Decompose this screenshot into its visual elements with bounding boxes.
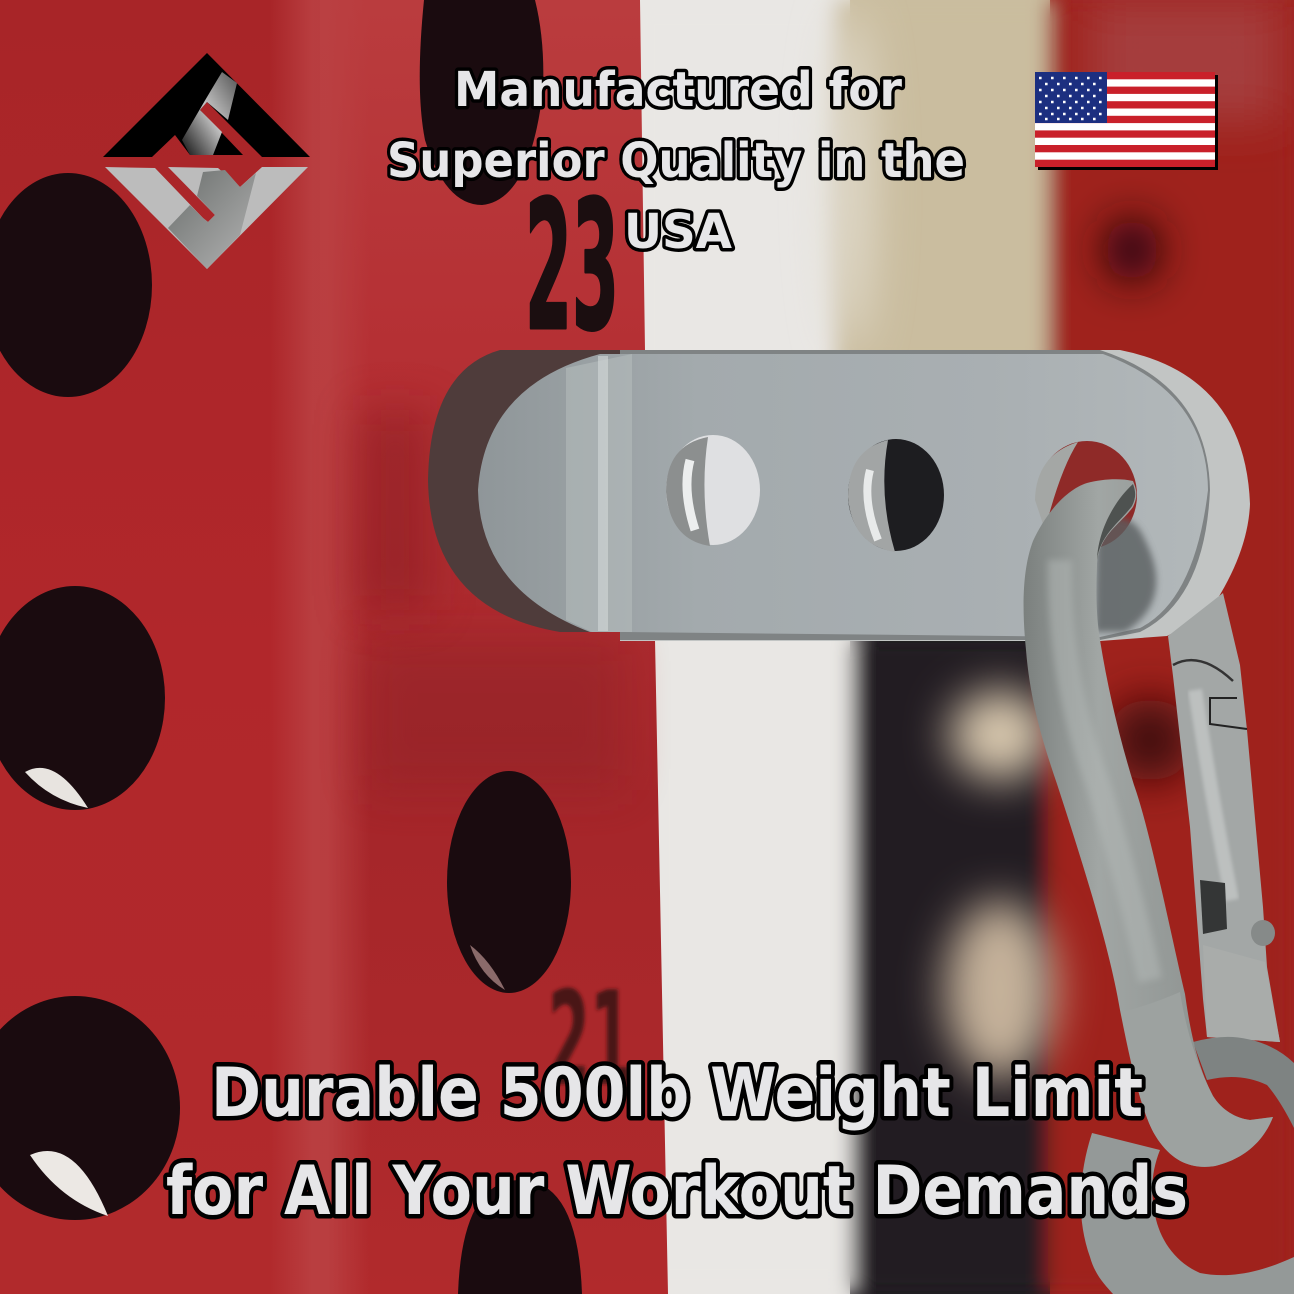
plate holes	[666, 435, 1137, 552]
printed numbers on post	[525, 163, 632, 1115]
lower ring	[1081, 1133, 1294, 1294]
logo top black triangle	[103, 53, 310, 157]
rack holes	[0, 0, 582, 1294]
plate face	[478, 354, 1208, 637]
background photo: red rack post and blurred gym: 21	[548, 963, 632, 1115]
logo dark band	[168, 170, 256, 269]
headline: manufactured in USA: Superior Quality in the	[387, 133, 965, 189]
headline: manufactured in USA: Manufactured for	[454, 62, 902, 118]
headline: manufactured in USA: USA	[624, 204, 732, 260]
back gate of carabiner	[1168, 593, 1280, 1042]
headline: weight limit	[166, 1054, 1188, 1231]
steel anchor plate	[428, 350, 1250, 641]
headline: manufactured in USA	[387, 62, 965, 260]
blurred gym background	[630, 0, 1294, 1294]
carabiner hook	[1024, 479, 1294, 1294]
far rim of plate	[620, 350, 1250, 641]
logo bottom silver triangle	[105, 167, 308, 269]
upper ring	[1193, 1037, 1294, 1128]
headline: weight limit: for All Your Workout Demands	[166, 1152, 1188, 1231]
logo gloss	[182, 72, 237, 155]
plate shadow side on post	[428, 350, 620, 632]
American flag	[1035, 72, 1218, 170]
logo	[103, 53, 310, 269]
rack post faces	[0, 0, 668, 1294]
dark underside shadow of hook on plate	[1095, 518, 1156, 632]
background photo: red rack post and blurred gym: 23	[525, 163, 619, 370]
main hook body	[1024, 479, 1273, 1167]
headline: weight limit: Durable 500lb Weight Limit	[211, 1054, 1143, 1133]
